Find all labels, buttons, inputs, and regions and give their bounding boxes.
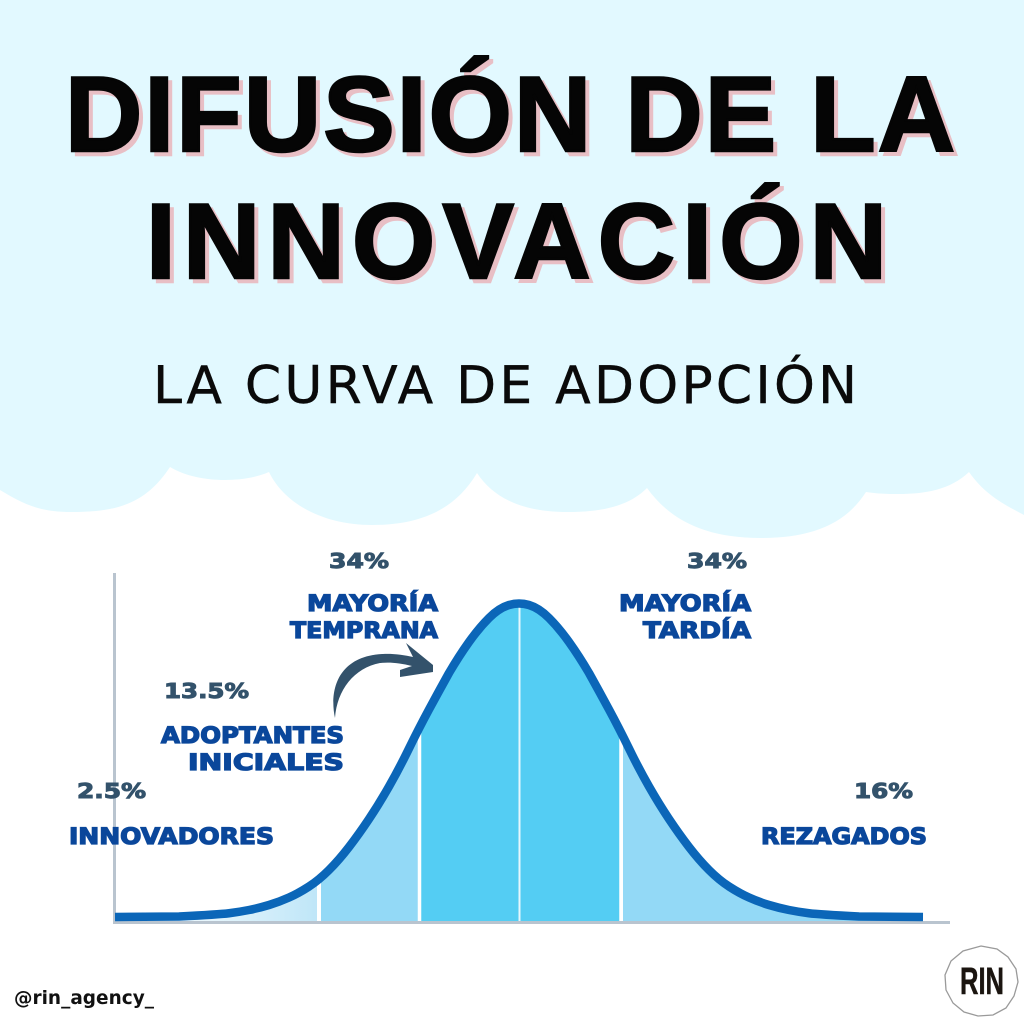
title (65, 54, 959, 305)
handle: @rin_agency_: @rin_agency_ (14, 987, 154, 1009)
icon: curved arrow (333, 643, 433, 718)
label: rezagados: REZAGADOS (761, 824, 927, 850)
title: DIFUSIÓN DE LA (69, 58, 959, 178)
label: mayoría tardía (619, 589, 752, 644)
segment: rezagados (623, 746, 884, 921)
subtitle: LA CURVA DE ADOPCIÓN (153, 354, 857, 416)
label: 34% early majority: 34% (329, 549, 389, 573)
segment: adoptantes iniciales (321, 740, 418, 921)
label: adoptantes iniciales: ADOPTANTES (161, 723, 344, 749)
chart axes (114, 573, 950, 922)
segment: mayoría temprana (421, 600, 519, 921)
segment: innovadores (170, 886, 317, 921)
label: 16%: 16% (854, 779, 913, 803)
logo: RIN badge: RIN (960, 961, 1004, 1003)
label: adoptantes iniciales (161, 723, 344, 776)
label: mayoría temprana: TEMPRANA (290, 618, 439, 644)
curve line (115, 604, 923, 917)
label: 2.5%: 2.5% (77, 779, 146, 803)
logo: RIN badge (945, 946, 1018, 1016)
label: mayoría tardía: MAYORÍA (619, 589, 752, 617)
label: innovadores: INNOVADORES (69, 824, 274, 850)
label: mayoría temprana (290, 589, 439, 644)
label: mayoría temprana: MAYORÍA (307, 589, 439, 617)
label: mayoría tardía: TARDÍA (643, 616, 752, 644)
label: 13.5%: 13.5% (164, 679, 249, 703)
segment: mayoría tardía (520, 600, 620, 921)
label: adoptantes iniciales: INICIALES (188, 750, 344, 776)
title: INNOVACIÓN (146, 181, 887, 301)
label: 34% late majority: 34% (687, 549, 747, 573)
title: INNOVACIÓN (150, 185, 891, 305)
bell curve chart (115, 600, 923, 921)
title: DIFUSIÓN DE LA (65, 54, 955, 174)
cloud background panel (0, 0, 1024, 538)
